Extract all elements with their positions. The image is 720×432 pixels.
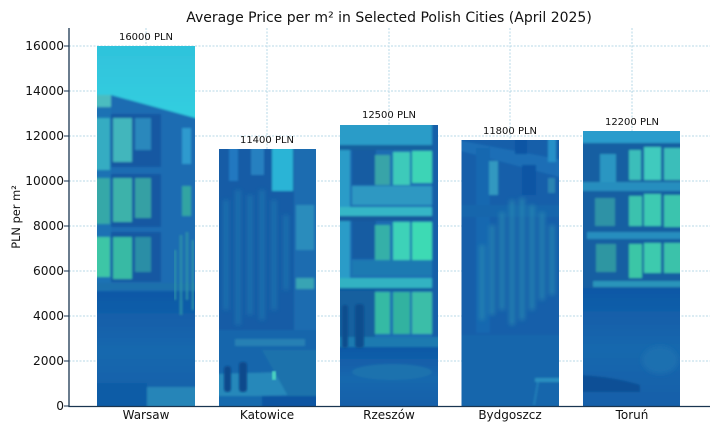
- y-axis tick labels: 0: [56, 399, 64, 413]
- value labels: 11400 PLN: [240, 135, 294, 146]
- tree: [226, 190, 286, 325]
- x-axis category labels: Toruń: [615, 408, 648, 422]
- x-axis category labels: Warsaw: [123, 408, 170, 422]
- bar: Bydgoszcz 11800: [462, 140, 559, 406]
- people and lamp: [224, 362, 247, 392]
- gridlines: [69, 28, 710, 406]
- y-axis tick labels: 10000: [25, 174, 64, 188]
- bar: Rzeszów 12500: [340, 125, 438, 406]
- value labels: 12500 PLN: [362, 110, 416, 121]
- willow: [482, 198, 552, 325]
- title: Average Price per m² in Selected Polish Cities (April 2025): [186, 10, 592, 26]
- bar: Warsaw 16000: [93, 42, 199, 410]
- axes: [64, 28, 710, 406]
- bar: Toruń 12200: [583, 131, 680, 406]
- value labels: [119, 32, 659, 146]
- value labels: 11800 PLN: [483, 126, 537, 137]
- y-axis tick labels: 16000: [25, 39, 64, 53]
- value labels: 16000 PLN: [119, 32, 173, 43]
- value labels: 12200 PLN: [605, 117, 659, 128]
- shrubs: [644, 358, 676, 373]
- y-axis tick labels: 12000: [25, 129, 64, 143]
- x-axis category labels: Rzeszów: [363, 408, 415, 422]
- willow streaks: [175, 232, 193, 315]
- x-axis category labels: [123, 408, 648, 422]
- y-axis tick labels: 2000: [33, 354, 64, 368]
- y-axis tick labels: 8000: [33, 219, 64, 233]
- y-axis tick labels: 14000: [25, 84, 64, 98]
- x-axis category labels: Bydgoszcz: [478, 408, 542, 422]
- y-axis title: PLN per m²: [9, 185, 23, 249]
- y-axis tick labels: 6000: [33, 264, 64, 278]
- people: [342, 304, 364, 348]
- y-axis tick labels: [25, 39, 64, 413]
- x-axis category labels: Katowice: [240, 408, 294, 422]
- y-axis tick labels: 4000: [33, 309, 64, 323]
- bar: Katowice 11400: [219, 149, 316, 406]
